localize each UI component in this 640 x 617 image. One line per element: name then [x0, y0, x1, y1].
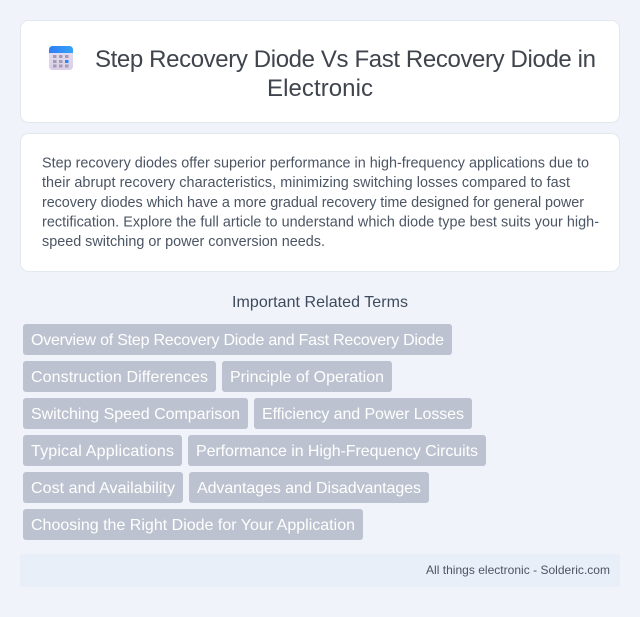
- tag: switching speed: [23, 398, 248, 429]
- title: [95, 46, 596, 102]
- icon: calendar: [49, 46, 73, 70]
- description text: recovery diodes which have a more gradual recovery time designed for general power: [42, 195, 584, 211]
- tag: performance: [188, 435, 486, 466]
- tag: choosing: Choosing the Right Diode for Your Application: [31, 517, 355, 534]
- footer: [20, 554, 620, 587]
- tag: performance: Performance in High-Frequency Circuits: [196, 443, 478, 460]
- description text: their abrupt recovery characteristics, minimizing switching losses compared to fast: [42, 175, 570, 191]
- related terms tags: [23, 324, 486, 540]
- tag: switching speed: Switching Speed Comparison: [31, 406, 240, 423]
- tag: principle: [222, 361, 392, 392]
- tag: cost: Cost and Availability: [31, 480, 175, 497]
- description text: Step recovery diodes offer superior performance in high-frequency applications due to: [42, 156, 589, 172]
- title: Electronic: [267, 75, 373, 102]
- heading: important related terms: Important Related Terms: [232, 294, 408, 311]
- tag: overview: Overview of Step Recovery Diode and Fast Recovery Diode: [31, 332, 444, 349]
- tag: advantages: [189, 472, 429, 503]
- panel: description: [20, 134, 620, 272]
- header panel: [20, 20, 620, 122]
- tag: applications: [23, 435, 182, 466]
- description text: [42, 156, 599, 250]
- tag: construction: [23, 361, 216, 392]
- tag: advantages: Advantages and Disadvantages: [197, 480, 421, 497]
- tag: principle: Principle of Operation: [230, 369, 384, 386]
- footer credit: All things electronic - Solderic.com: [426, 563, 610, 577]
- tag: overview: [23, 324, 452, 355]
- tag: efficiency: [254, 398, 472, 429]
- tag: cost: [23, 472, 183, 503]
- title: Step Recovery Diode Vs Fast Recovery Diode in: [95, 46, 596, 73]
- tag: efficiency: Efficiency and Power Losses: [262, 406, 464, 423]
- tag: choosing: [23, 509, 363, 540]
- description text: speed switching or power conversion needs.: [42, 234, 325, 250]
- description text: rectification. Explore the full article to understand which diode type best suits your high-: [42, 214, 599, 230]
- tag: applications: Typical Applications: [31, 443, 174, 460]
- tag: construction: Construction Differences: [31, 369, 208, 386]
